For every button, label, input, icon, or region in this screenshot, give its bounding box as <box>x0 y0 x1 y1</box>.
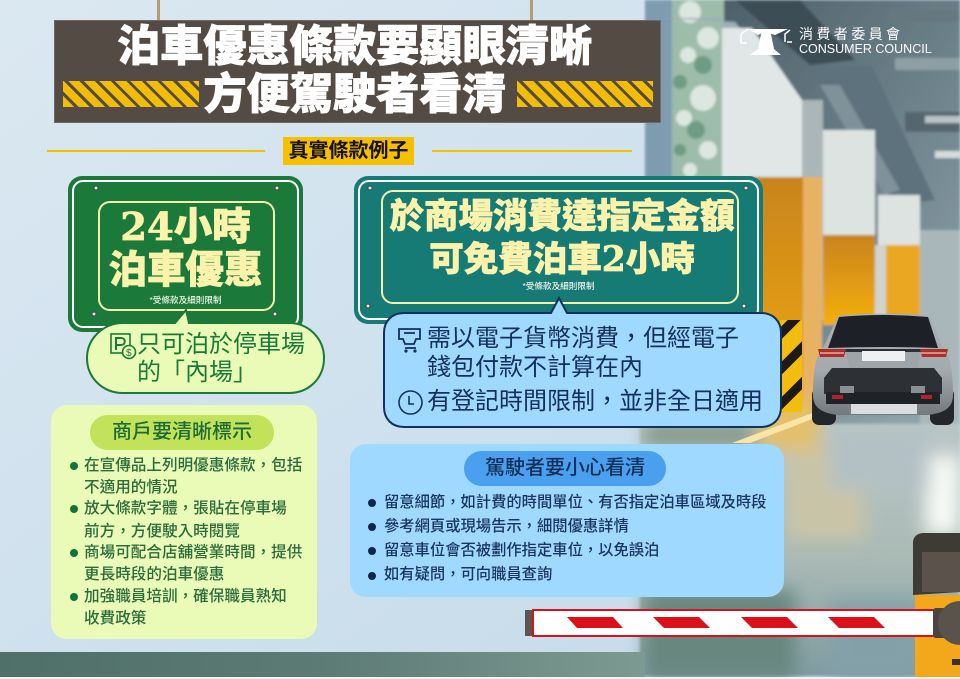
drivers heading <box>464 451 666 486</box>
screws <box>366 186 748 308</box>
merchants item 3: 商場可配合店舖營業時間，提供 <box>84 544 302 561</box>
sign heading: 24小時 <box>120 205 251 250</box>
drivers item 3: 留意車位會否被劃作指定車位，以免誤泊 <box>384 542 659 559</box>
screws <box>92 186 280 316</box>
section heading rule left <box>47 150 265 152</box>
logo: Consumer Council <box>740 26 932 56</box>
drivers item 4: 如有疑問，可向職員查詢 <box>384 566 552 583</box>
parking barrier <box>525 533 960 677</box>
merchants item 2 continued: 前方，方便駛入時閱覽 <box>84 523 240 540</box>
merchants item 3 continued: 更長時段的泊車優惠 <box>84 566 224 583</box>
callout shape <box>86 309 325 394</box>
panel: merchants <box>51 405 317 639</box>
bullet <box>70 505 78 513</box>
merchants heading: 商戶要清晰標示 <box>112 421 252 443</box>
section heading: 真實條款例子 <box>288 140 408 162</box>
title banner <box>54 20 661 123</box>
rope left <box>157 0 160 20</box>
sign footnote: *受條款及細則限制 <box>522 281 595 291</box>
drivers heading: 駕駛者要小心看清 <box>485 457 645 479</box>
icon: parking payment <box>110 333 136 360</box>
bullet <box>368 523 376 531</box>
icon: clock <box>398 390 423 415</box>
logo text chinese: 消費者委員會 <box>799 26 903 42</box>
callout text line 2: 的「內場」 <box>137 359 257 386</box>
sign white outline <box>72 180 299 328</box>
merchants heading <box>90 415 274 450</box>
title line 1: 泊車優惠條款要顯眼清晰 <box>117 23 592 71</box>
car <box>812 314 954 425</box>
icon: scales <box>740 28 792 55</box>
callout shape <box>383 296 782 428</box>
panel: green sign <box>68 176 303 332</box>
merchants item 4: 加強職員培訓，確保職員熟知 <box>84 588 287 605</box>
sign inner frame <box>381 190 739 304</box>
callout: blue <box>383 296 782 428</box>
icon: parking payment: $ <box>126 348 132 359</box>
hazard stripes on pillar <box>780 320 802 412</box>
panel: teal sign <box>354 176 763 324</box>
hazard stripe right <box>517 81 653 107</box>
sign heading line 2: 泊車優惠 <box>108 249 262 292</box>
merchants item 1: 在宣傳品上列明優惠條款，包括 <box>84 457 302 474</box>
drivers item 1: 留意細節，如計費的時間單位、有否指定泊車區域及時段 <box>384 494 766 511</box>
icon: shop cart <box>398 328 421 353</box>
logo text english: CONSUMER COUNCIL <box>799 42 932 56</box>
callout text line 3: 有登記時間限制，並非全日適用 <box>427 388 763 415</box>
callout text line 2: 錢包付款不計算在內 <box>427 354 643 381</box>
hazard stripe left <box>63 81 199 107</box>
callout: green <box>86 309 325 394</box>
sign inner frame <box>98 201 275 311</box>
bullet <box>368 499 376 507</box>
bullet <box>70 549 78 557</box>
section heading rule right <box>432 150 632 152</box>
sign heading line 2: 可免費泊車2小時 <box>429 240 695 280</box>
merchants item 2: 放大條款字體，張貼在停車場 <box>84 500 287 517</box>
merchants item 4 continued: 收費政策 <box>84 610 146 627</box>
sign heading line 1: 於商場消費達指定金額 <box>390 198 734 236</box>
sign footnote: *受條款及細則限制 <box>149 295 222 305</box>
sign white outline <box>358 180 759 320</box>
drivers item 2: 參考網頁或現場告示，細閱優惠詳情 <box>384 518 629 535</box>
merchants item 1 continued: 不適用的情況 <box>84 479 178 496</box>
bullet <box>368 572 376 580</box>
callout text line 1: 需以電子貨幣消費，但經電子 <box>427 325 739 352</box>
bullet <box>70 462 78 470</box>
rope right <box>530 0 533 20</box>
panel: drivers <box>350 444 784 597</box>
bullet <box>368 547 376 555</box>
bullet <box>70 593 78 601</box>
title line 2: 方便駕駛者看清 <box>203 71 506 119</box>
callout text line 1: 只可泊於停車場 <box>137 331 305 358</box>
